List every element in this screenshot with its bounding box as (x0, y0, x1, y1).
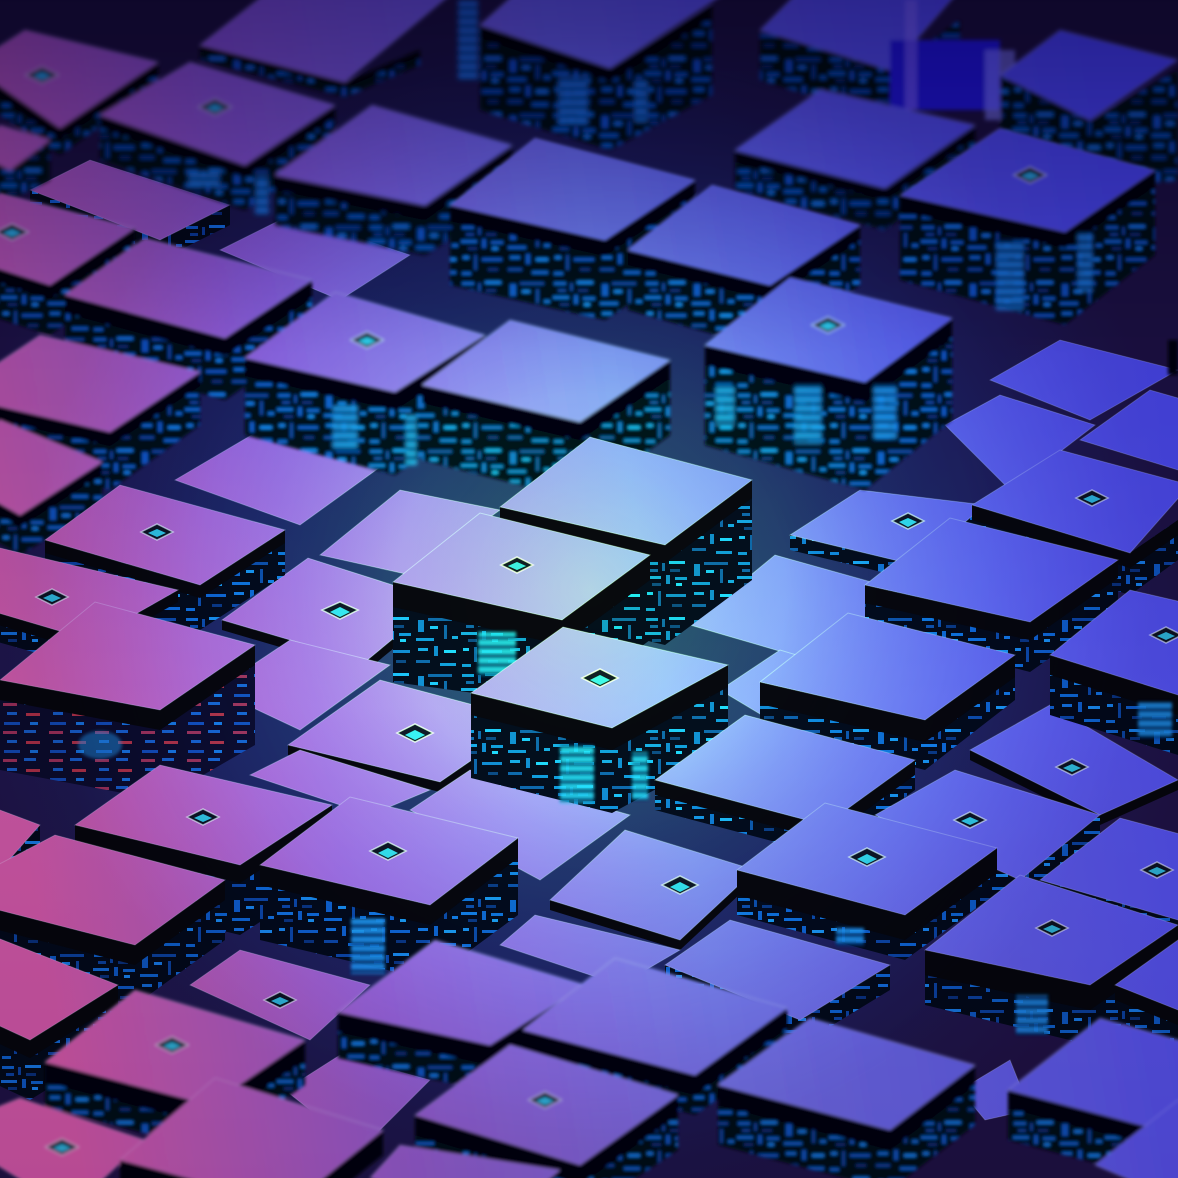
block: right edge small (1115, 940, 1178, 1045)
block: far right edge (1168, 340, 1178, 375)
block: centre right plain (628, 185, 860, 350)
block: top centre (458, 0, 730, 150)
block: upper right plain (735, 90, 975, 230)
block: left chip plain (45, 485, 285, 630)
block: left mid plain (0, 335, 200, 490)
block: far left edge (0, 125, 50, 200)
tile: upper left flat (30, 160, 230, 260)
tile: chip behind right blocks (790, 490, 985, 580)
block: upper row plain (275, 105, 512, 255)
block: centre left chip lower (260, 797, 518, 980)
block: bottom right edge (1095, 1100, 1178, 1178)
middle upper blocks (0, 128, 1178, 555)
block: top right glow (890, 0, 1178, 190)
block: left purple (0, 835, 225, 1005)
in-focus centre blocks (0, 390, 1178, 1100)
far blocks row: out of focus (0, 0, 1178, 255)
block: lower right edge (1008, 1018, 1178, 1178)
tile: centre reflective (320, 490, 500, 575)
block: right edge upper (1080, 390, 1178, 470)
block: right lower chip plain (875, 770, 1100, 905)
block: right mid chip (1050, 590, 1178, 755)
block: rear centre (500, 437, 752, 645)
block: bottom centre chip (415, 1045, 678, 1178)
block: centre hero chip (471, 627, 728, 813)
block: lower centre left (338, 940, 585, 1092)
block: bottom centre sliver (370, 1145, 560, 1178)
tile: bottom right (960, 1060, 1030, 1120)
block: left magenta tall (0, 602, 255, 800)
tile: chip lower left (190, 950, 370, 1040)
block: lower centre right (523, 958, 787, 1115)
tile: far right (990, 340, 1178, 420)
tile: centre chip (288, 680, 530, 792)
tile: lower right of centre (665, 920, 890, 1045)
block: lower left pink chip (45, 990, 305, 1150)
block: lower right large (718, 1018, 975, 1178)
tile: bottom left of centre (285, 1055, 430, 1150)
tile: chip below centre (550, 830, 755, 950)
tile: centre lower (410, 770, 630, 880)
block: left edge small (0, 810, 40, 895)
block: right chip tall (705, 278, 952, 490)
block: upper left magenta (100, 62, 335, 215)
tile: below left of centre (215, 640, 390, 730)
block: left plain (65, 238, 312, 400)
block: top left magenta (0, 30, 158, 155)
block: centre bright chip (393, 513, 650, 705)
block: right upper wide (865, 518, 1118, 672)
block: right edge chip (1040, 818, 1178, 960)
block: upper centre (450, 138, 695, 320)
block: left edge low (0, 420, 102, 555)
block: right blue chip (925, 875, 1178, 1045)
near blocks row: slightly out of focus (0, 940, 1178, 1178)
tile: left reflective (175, 430, 390, 525)
tile: right lower chip (970, 705, 1178, 825)
block: right lower chip (737, 803, 997, 960)
tile: right of centre lower (720, 650, 830, 720)
block: centre left chip (245, 292, 485, 475)
tile: light strip lower centre (500, 915, 680, 985)
block: lower right of centre (655, 715, 915, 855)
block: far top right (760, 0, 960, 120)
tile: chip left of centre (222, 558, 440, 672)
block: top far (200, 0, 450, 97)
block: left pink low (0, 935, 118, 1100)
block: right of centre wide (760, 613, 1015, 770)
block: left low chip (0, 548, 178, 668)
tile: right mid (945, 395, 1095, 490)
block: bottom left pink (120, 1078, 383, 1178)
tile: reflective right of centre (690, 555, 900, 660)
block: left edge chip (0, 193, 135, 335)
tile: lower left of centre (250, 750, 430, 815)
tile: mirror top left (220, 215, 410, 300)
block: left mid chip (75, 765, 332, 935)
block: bottom left chip (0, 1098, 145, 1178)
block: right rear chip (972, 450, 1178, 595)
block: centre plain (422, 320, 670, 500)
block: top right with chip (900, 128, 1155, 325)
